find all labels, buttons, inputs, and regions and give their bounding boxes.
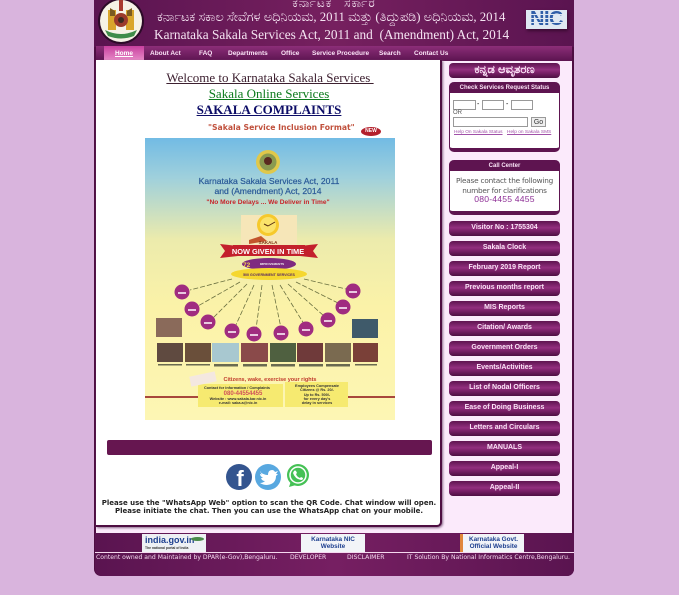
- status inputs: [453, 100, 552, 135]
- header text: Kannada act title: ಕರ್ನಾಟಕ ಸಕಾಲ ಸೇವೆಗಳ ಅಧಿನಿಯಮ, 2011 ಮತ್ತು (ತಿದ್ದುಪಡಿ) ಅಧಿನಿಯಮ, 2014: [157, 10, 505, 24]
- poster bottom band: [145, 371, 395, 407]
- icon: new badge: [361, 127, 381, 136]
- status inputs: Help on Sakala SMS: [507, 130, 551, 135]
- poster bottom band: Citizens, wake, exercise your rights: [224, 377, 316, 383]
- page frame: [94, 0, 574, 576]
- heading: complaints: SAKALA COMPLAINTS: [197, 102, 341, 117]
- sidebar buttons: Letters and Circulars: [469, 424, 540, 431]
- panel: call center: [449, 160, 560, 215]
- poster bottom band: Contact for information / Complaints: [204, 386, 270, 390]
- sidebar buttons: Events/Activities: [476, 364, 533, 371]
- sidebar buttons: Appeal-II: [490, 484, 519, 491]
- panel heading: Call Center: [489, 163, 520, 169]
- menu items: Office: [281, 50, 299, 57]
- menu items: About Act: [150, 50, 181, 57]
- menu items: Departments: [228, 50, 268, 57]
- header text: English act title: Karnataka Sakala Services Act, 2011 and (Amendment) Act, 2014: [154, 27, 509, 42]
- footer credits: DISCLAIMER: [347, 554, 384, 561]
- poster bottom band: delay in services: [302, 401, 332, 405]
- footer logo: india.gov.in: The national portal of India: [145, 546, 188, 550]
- poster circle highlights: [178, 291, 357, 336]
- icon: whatsapp: [287, 464, 309, 487]
- sidebar buttons: MANUALS: [487, 444, 522, 451]
- poster service circles: [174, 284, 360, 342]
- icon: new badge: NEW: [365, 128, 377, 134]
- footer link: Karnataka Govt: Karnataka Govt.: [469, 536, 518, 543]
- panel heading: [449, 82, 560, 93]
- sidebar buttons: [449, 221, 560, 496]
- poster bottom band: Citizens @ Rs. 20/-: [300, 388, 335, 392]
- button: Kannada version: [449, 63, 560, 78]
- panel heading: [449, 160, 560, 171]
- poster badges: 72: [243, 262, 251, 269]
- sidebar buttons: Visitor No : 1755304: [471, 224, 538, 231]
- icon: facebook: f: [236, 466, 244, 491]
- poster badges: [231, 258, 307, 280]
- inclusion format link: "Sakala Service Inclusion Format": [208, 123, 355, 132]
- status inputs: -: [506, 101, 508, 108]
- poster bottom band: e-mail: saka.a@nic.in: [219, 401, 258, 405]
- sidebar buttons: Previous months report: [465, 284, 544, 291]
- poster bottom band: 080-44554455: [224, 391, 263, 397]
- status inputs: Go: [534, 119, 543, 126]
- poster: [145, 138, 395, 420]
- sidebar buttons: Sakala Clock: [483, 244, 526, 251]
- WhatsApp instructions: Please initiate the chat. Then you can use the WhatsApp chat on your mobile.: [115, 507, 423, 515]
- call center message: [456, 176, 553, 194]
- footer logo: india.gov.in: india.gov.in: [145, 535, 194, 545]
- main content panel: [96, 60, 442, 527]
- poster photo captions: [158, 364, 377, 366]
- poster badges: IMPROVEMENTS: [260, 262, 284, 266]
- WhatsApp instructions: Please use the "WhatsApp Web" option to scan the QR Code. Chat window will open.: [102, 499, 436, 507]
- navigation menu: [96, 46, 572, 61]
- poster ribbon: [220, 244, 318, 258]
- footer credits: Content owned and Maintained by DPAR(e-Gov),Bengaluru.: [96, 554, 277, 561]
- menu items: Search: [379, 50, 401, 57]
- footer credits: DEVELOPER: [290, 554, 326, 561]
- poster clock card: SAKALA: [259, 240, 278, 245]
- icon: twitter: [255, 464, 281, 490]
- poster title: Karnataka Sakala Services Act, 2011: [199, 176, 340, 186]
- poster title: "No More Delays ... We Deliver in Time": [206, 199, 330, 206]
- panel heading: Check Services Request Status: [460, 85, 549, 91]
- sidebar buttons: MIS Reports: [484, 304, 525, 311]
- poster bottom band: Up to Rs. 500/-: [304, 393, 331, 397]
- footer: [95, 533, 574, 576]
- poster title: [199, 176, 340, 206]
- poster bottom band: Employees Compensate: [295, 384, 339, 388]
- sidebar buttons: Government Orders: [471, 344, 538, 351]
- heading: online services: Sakala Online Services: [209, 86, 329, 101]
- footer link: Karnataka NIC: [301, 534, 365, 552]
- poster badges: 500 GOVERNMENT SERVICES: [243, 273, 296, 277]
- sidebar buttons: Appeal-I: [491, 464, 518, 471]
- call center message: Please contact the following: [456, 176, 553, 185]
- active menu item: Home: [104, 46, 144, 61]
- footer link: Karnataka Govt: [460, 534, 524, 552]
- menu items: FAQ: [199, 50, 212, 57]
- button: Kannada version: ಕನ್ನಡ ಆವೃತರಣ: [474, 64, 535, 76]
- poster bottom band: for every day's: [304, 397, 330, 401]
- call center message: number for clarifications: [462, 186, 547, 194]
- footer link: Karnataka NIC: Website: [321, 543, 345, 550]
- status inputs: Help On Sakala Status: [454, 130, 503, 135]
- poster photos: [156, 318, 378, 362]
- poster ribbon: NOW GIVEN IN TIME: [232, 247, 304, 256]
- poster bottom band: Website : www.sakala.kar.nic.in: [210, 397, 267, 401]
- panel: check service request status: [449, 82, 560, 152]
- sidebar buttons: Ease of Doing Business: [465, 404, 544, 411]
- poster title: and (Amendment) Act, 2014: [214, 186, 322, 196]
- footer credits: IT Solution By National Informatics Centre,Bengaluru.: [407, 554, 570, 561]
- header banner: [94, 0, 574, 47]
- status inputs: OR: [453, 110, 462, 116]
- active menu item: Home: Home: [115, 50, 133, 57]
- menu items: [150, 50, 448, 57]
- status inputs: -: [477, 101, 479, 108]
- WhatsApp instructions: [102, 499, 436, 515]
- menu items: Service Procedure: [312, 50, 369, 57]
- footer logo: india.gov.in: [142, 534, 206, 552]
- poster emblem: [256, 150, 280, 174]
- social icons: [226, 464, 309, 491]
- icon: state emblem: [98, 0, 144, 44]
- menu items: Contact Us: [414, 50, 448, 57]
- poster rays: [190, 279, 346, 329]
- sidebar buttons: Citation/ Awards: [477, 324, 532, 331]
- poster clock card: [241, 214, 297, 250]
- sidebar buttons: List of Nodal Officers: [469, 384, 540, 391]
- footer link: Karnataka Govt: Official Website: [470, 543, 517, 550]
- footer credits: [95, 552, 574, 564]
- footer link: Karnataka NIC: Karnataka NIC: [311, 536, 355, 543]
- sidebar buttons: February 2019 Report: [468, 264, 540, 271]
- content divider bar: [107, 440, 432, 455]
- phone number: 080-4455 4455: [474, 194, 535, 204]
- heading: welcome: Welcome to Karnataka Sakala Services: [166, 70, 370, 85]
